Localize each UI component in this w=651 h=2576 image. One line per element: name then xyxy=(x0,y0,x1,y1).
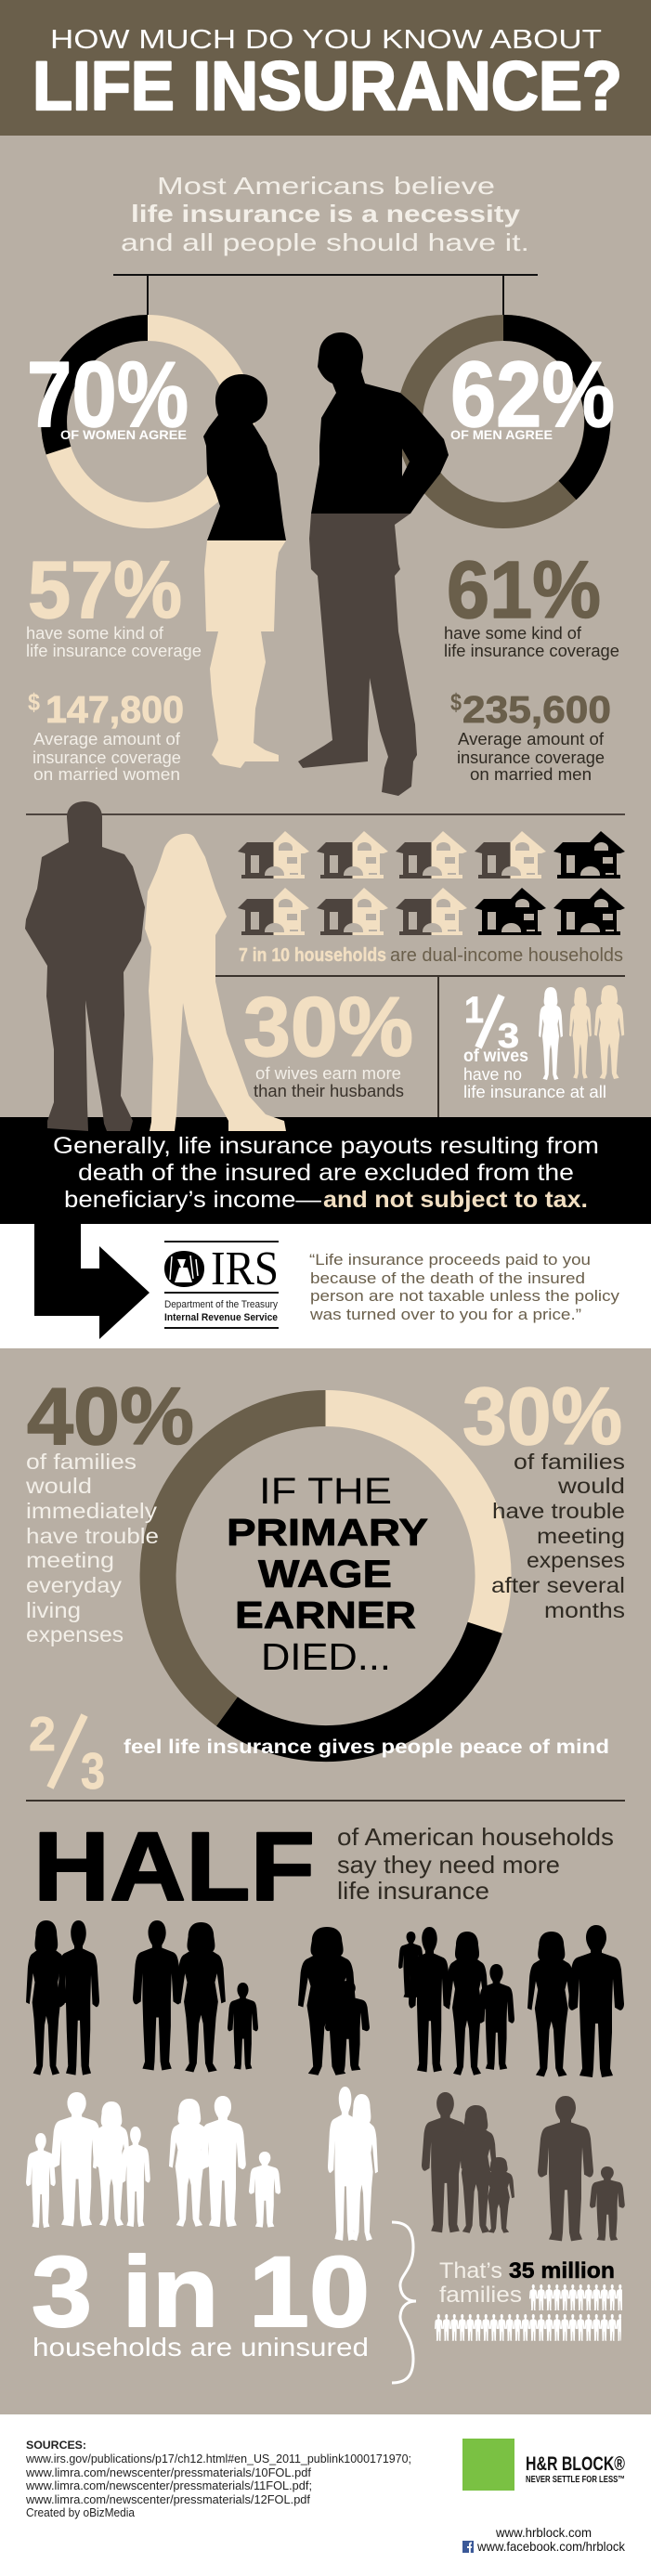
silhouette: second woman xyxy=(145,834,286,1131)
stat: 40% of families: 40% xyxy=(27,1372,194,1462)
dividers around wives stats xyxy=(215,975,625,1117)
stat: 57% women coverage: life insurance coverage xyxy=(26,642,202,660)
divider xyxy=(26,813,625,815)
stat: 30% of families: have trouble xyxy=(492,1499,625,1523)
stat: $147,800 women xyxy=(28,688,184,784)
quote text: person are not taxable unless the policy xyxy=(310,1287,620,1305)
connector lines xyxy=(113,275,538,316)
stat: 62% of men agree: OF MEN AGREE xyxy=(450,427,553,442)
quote text: was turned over to you for a price.” xyxy=(309,1306,581,1323)
center heading in donut: WAGE xyxy=(258,1552,392,1595)
intro statement: and all people should have it. xyxy=(121,228,529,256)
stat: 35 million families: That’s xyxy=(439,2258,502,2283)
stat: $147,800 women: on married women xyxy=(33,765,180,784)
sources: www.irs.gov/publications/p17/ch12.html#en_US_2011_publink1000171970; xyxy=(25,2452,411,2465)
stat: $235,600 men: $ xyxy=(450,688,462,716)
stat: $235,600 men: Average amount of xyxy=(458,730,605,748)
header banner xyxy=(0,0,651,136)
stat: 40% of families: immediately xyxy=(26,1499,158,1523)
panel: IRS quote xyxy=(0,1224,651,1348)
stat: two thirds peace of mind: feel life insurance gives people peace of mind xyxy=(124,1737,609,1758)
arrow xyxy=(34,1224,150,1339)
intro statement: life insurance is a necessity xyxy=(131,200,521,228)
stat: one third of wives: of wives xyxy=(463,1047,528,1066)
title line 2: LIFE INSURANCE? xyxy=(33,47,622,124)
stat: 30% of families: 30% xyxy=(462,1372,622,1462)
stat: 40% of families xyxy=(25,1372,194,1646)
stat: 35 million families: families xyxy=(439,2283,522,2308)
white family silhouettes xyxy=(26,2087,378,2241)
stat: 30% of families: meeting xyxy=(537,1524,625,1548)
quote text: because of the death of the insured xyxy=(310,1269,585,1287)
stat: half of households xyxy=(33,1813,614,1921)
stat: 40% of families: meeting xyxy=(26,1548,114,1572)
stat: 61% men coverage: 61% xyxy=(447,545,601,635)
stat: 57% women coverage: 57% xyxy=(28,545,182,635)
center heading in donut: DIED... xyxy=(261,1635,391,1678)
divider xyxy=(26,1800,625,1802)
intro statement: Most Americans believe xyxy=(157,172,495,200)
IRS logo: IRS xyxy=(211,1242,279,1295)
stat: 30% of families: would xyxy=(557,1474,625,1498)
stat: two thirds peace of mind: 2 xyxy=(29,1708,56,1762)
caption: dual-income households: are dual-income households xyxy=(390,945,623,966)
sources: Created by oBizMedia xyxy=(26,2505,136,2519)
stat: 30% of families xyxy=(462,1372,625,1622)
IRS logo: Department of the Treasury xyxy=(164,1299,278,1310)
stat: 70% of women agree: 70% xyxy=(27,343,189,447)
stat: half of households: HALF xyxy=(33,1813,315,1921)
silhouette: second man xyxy=(25,801,145,1131)
IRS logo xyxy=(164,1241,279,1329)
icon: facebook xyxy=(462,2541,474,2553)
stat: 3 in 10 uninsured: 3 in 10 xyxy=(32,2235,370,2348)
sources: www.limra.com/newscenter/pressmaterials/11FOL.pdf; xyxy=(25,2478,312,2492)
stat: 35 million families xyxy=(435,2258,622,2341)
stat: $235,600 men: on married men xyxy=(470,765,592,784)
web links: www.hrblock.com xyxy=(495,2525,592,2540)
stat: 35 million families: 35 million xyxy=(509,2258,615,2283)
stat: half of households: say they need more xyxy=(337,1851,560,1879)
stat: $235,600 men xyxy=(450,688,611,784)
stat: 30% of families: months xyxy=(544,1598,625,1622)
crowd of small figures xyxy=(435,2284,622,2341)
stat: half of households: life insurance xyxy=(337,1877,489,1905)
tax statement: and not subject to tax. xyxy=(323,1187,588,1213)
black tax band xyxy=(0,1117,651,1224)
stat: half of households: of American households xyxy=(337,1823,614,1851)
stat: one third of wives: have no xyxy=(463,1065,522,1084)
stat: 30% of families: after several xyxy=(491,1573,625,1597)
stat: 62% of men agree: 62% xyxy=(450,343,615,447)
stat: 40% of families: everyday xyxy=(26,1573,123,1597)
H&R Block logo xyxy=(462,2439,625,2491)
stat: $147,800 women: Average amount of xyxy=(33,730,181,748)
icon: three women xyxy=(539,985,624,1080)
stat: 70% of women agree: OF WOMEN AGREE xyxy=(60,427,187,442)
stat: 30% of families: of families xyxy=(514,1450,625,1474)
donut chart: 62% of men agree xyxy=(410,328,597,515)
brace xyxy=(392,2222,416,2383)
tax statement xyxy=(53,1133,599,1213)
center heading in donut: IF THE xyxy=(259,1471,392,1512)
sources xyxy=(25,2439,411,2519)
stat: 40% of families: of families xyxy=(26,1450,137,1474)
caption: dual-income households: 7 in 10 households xyxy=(239,945,386,966)
dark family silhouettes xyxy=(422,2092,625,2241)
stat: 61% men coverage: have some kind of xyxy=(444,624,582,643)
center heading in donut: EARNER xyxy=(235,1594,416,1636)
center heading in donut xyxy=(227,1471,428,1678)
intro statement xyxy=(121,172,529,256)
tax statement: Generally, life insurance payouts resulting from xyxy=(53,1133,599,1159)
silhouette: main woman xyxy=(203,374,286,768)
stat: 40% of families: living xyxy=(26,1598,81,1622)
stat: 30% wives earn more: 30% xyxy=(243,981,413,1074)
stat: $147,800 women: $ xyxy=(28,688,40,716)
web links xyxy=(462,2525,626,2554)
tax statement: beneficiary’s income— xyxy=(64,1187,321,1213)
stat: $235,600 men: 235,600 xyxy=(462,688,611,731)
IRS logo: Internal Revenue Service xyxy=(164,1312,278,1323)
web links: www.facebook.com/hrblock xyxy=(476,2539,626,2554)
stat: $235,600 men: insurance coverage xyxy=(457,748,605,767)
footer panel xyxy=(0,2414,651,2576)
quote text xyxy=(309,1251,620,1323)
donut chart: 70% of women agree xyxy=(54,328,241,515)
title line 1: HOW MUCH DO YOU KNOW ABOUT xyxy=(50,25,602,55)
tax statement: death of the insured are excluded from the xyxy=(78,1160,574,1186)
stat: one third of wives: 3 xyxy=(498,1017,519,1055)
stat: 40% of families: expenses xyxy=(26,1622,124,1646)
stat: 30% wives earn more: than their husbands xyxy=(254,1082,404,1100)
large donut chart xyxy=(158,1408,493,1744)
caption: dual-income households xyxy=(239,945,623,966)
stat: 30% wives earn more: of wives earn more xyxy=(255,1064,401,1083)
stat: 3 in 10 uninsured: households are uninsured xyxy=(33,2333,369,2361)
sources: www.limra.com/newscenter/pressmaterials/12FOL.pdf xyxy=(25,2492,310,2506)
sources: SOURCES: xyxy=(26,2439,86,2452)
stat: 40% of families: have trouble xyxy=(26,1524,159,1548)
stat: 30% of families: expenses xyxy=(527,1548,625,1572)
black family silhouettes xyxy=(26,1920,624,2077)
stat: $147,800 women: insurance coverage xyxy=(33,748,181,767)
stat: 57% women coverage: have some kind of xyxy=(26,624,164,643)
stat: one third of wives xyxy=(463,990,606,1101)
stat: one third of wives: life insurance at all xyxy=(463,1083,606,1101)
grid of ten houses xyxy=(238,831,625,935)
H&R Block logo: NEVER SETTLE FOR LESS™ xyxy=(526,2475,625,2485)
stat: $147,800 women: 147,800 xyxy=(46,688,184,731)
stat: one third of wives: 1 xyxy=(464,990,484,1031)
center heading in donut: PRIMARY xyxy=(227,1511,428,1554)
stat: 40% of families: would xyxy=(25,1474,92,1498)
quote text: “Life insurance proceeds paid to you xyxy=(309,1251,591,1268)
stat: 61% men coverage: life insurance coverage xyxy=(444,642,619,660)
stat: two thirds peace of mind xyxy=(29,1708,609,1800)
stat: two thirds peace of mind: 3 xyxy=(81,1742,105,1800)
silhouette: main man xyxy=(298,332,449,796)
sources: www.limra.com/newscenter/pressmaterials/10FOL.pdf xyxy=(25,2465,311,2479)
